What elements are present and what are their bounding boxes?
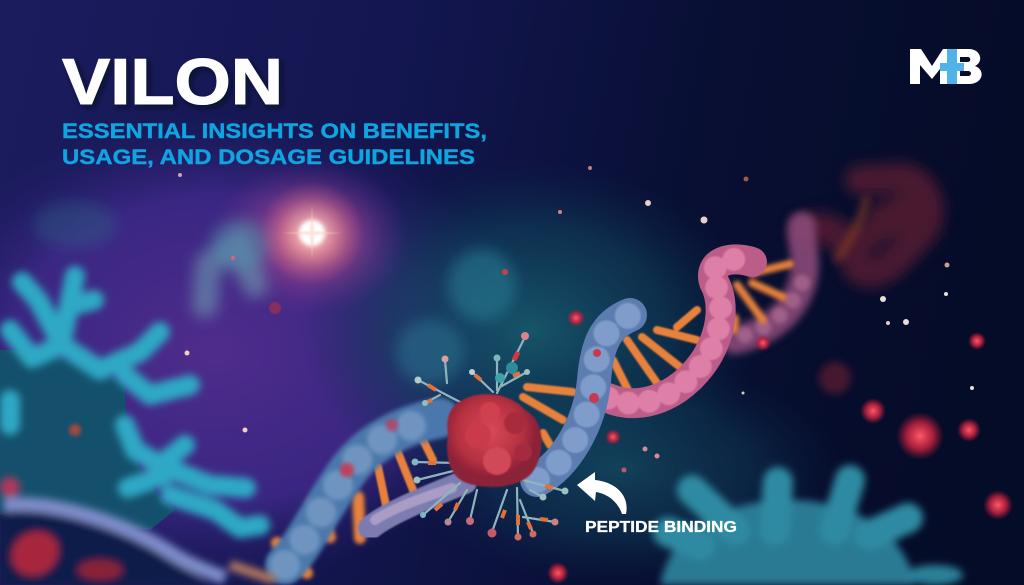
logo: M+B (910, 49, 982, 84)
blue strand (285, 315, 632, 565)
peptide blob (447, 394, 542, 487)
spike tips (412, 332, 568, 540)
title: VILON (62, 45, 283, 118)
pink strand (608, 259, 752, 403)
particles (69, 166, 1013, 584)
far end of helix, out of focus (735, 178, 929, 340)
lens flare (260, 181, 364, 285)
subtitle: ESSENTIAL INSIGHTS ON BENEFITS, (62, 120, 487, 143)
spike proteins around peptide (415, 337, 565, 537)
lower right virus (660, 480, 963, 585)
subtitle (62, 120, 487, 169)
lower left blurred strand (0, 477, 275, 585)
subtitle: USAGE, AND DOSAGE GUIDELINES (62, 146, 475, 169)
label: peptide binding: PEPTIDE BINDING (585, 519, 737, 536)
DNA rungs (277, 264, 790, 573)
blurred background viruses (33, 201, 516, 384)
arrow (577, 472, 627, 514)
left virus (0, 276, 260, 530)
